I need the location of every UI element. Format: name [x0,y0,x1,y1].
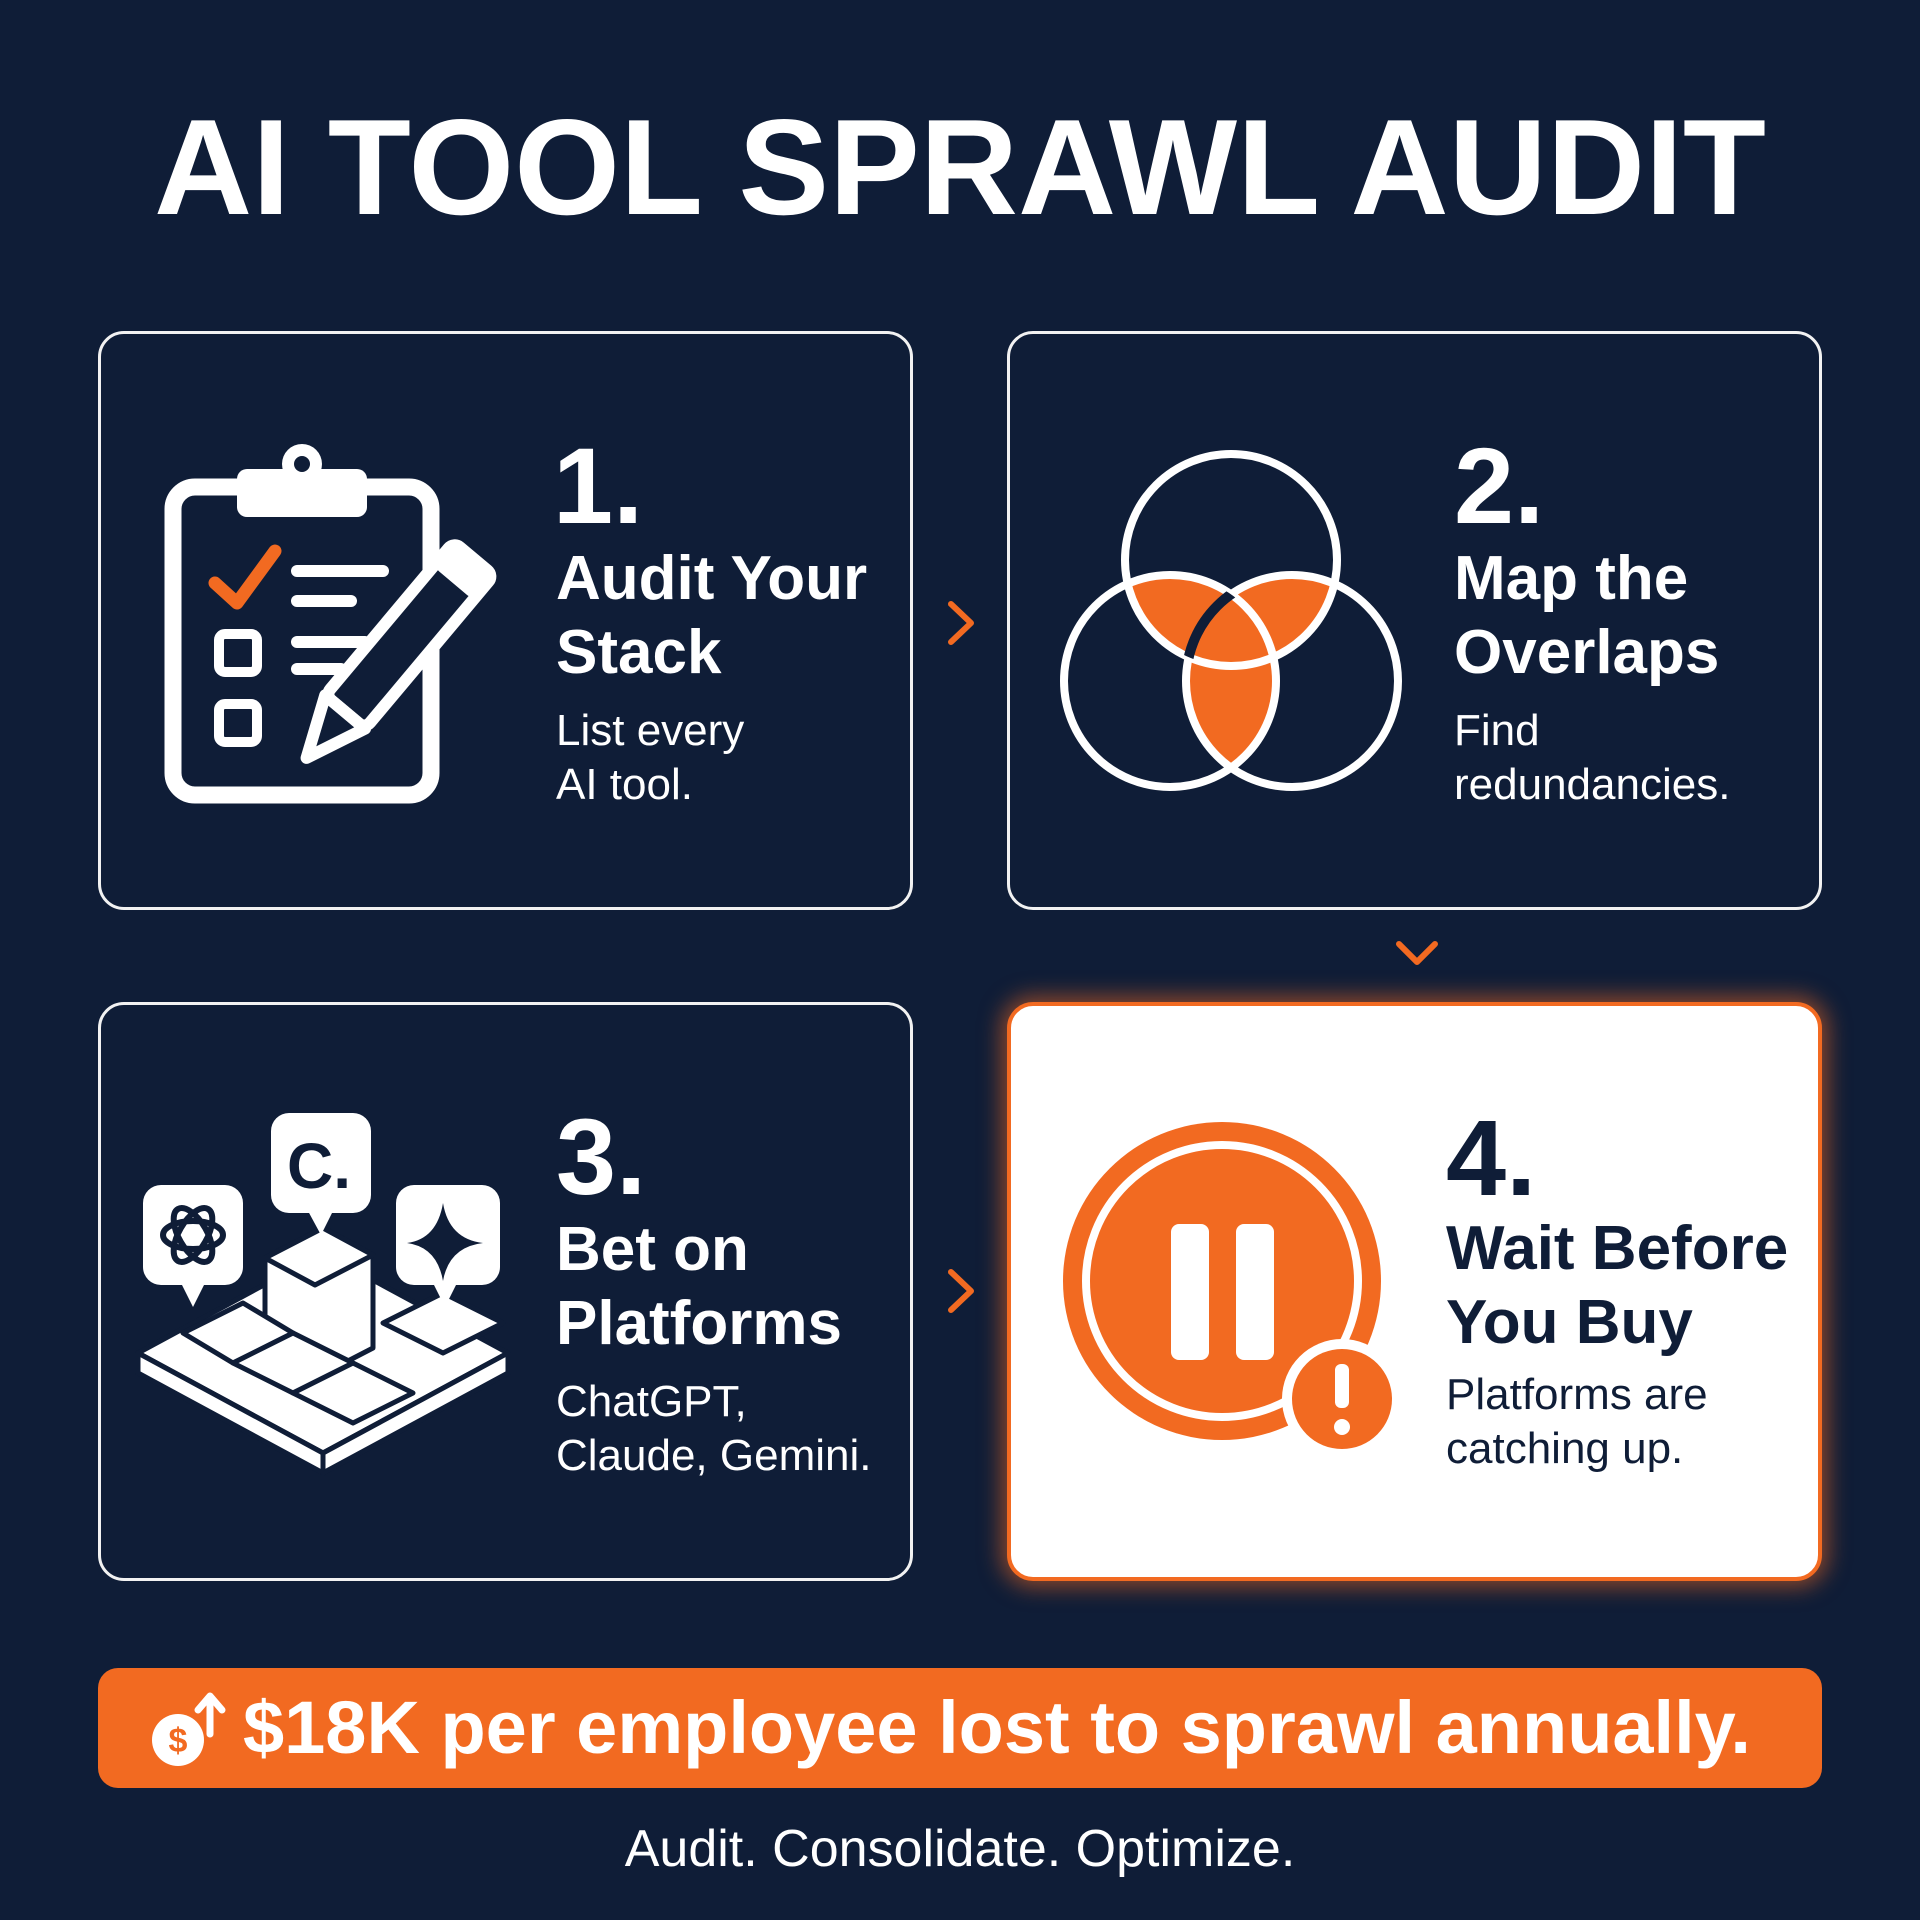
heading [1446,1214,1788,1357]
arrow: down [1396,941,1438,965]
heading: Bet on [556,1215,749,1284]
panel: 2 map the overlaps [1007,331,1822,910]
heading: Platforms [556,1289,842,1358]
arrow: right 2 [948,1269,974,1313]
icon: venn diagram [1060,450,1402,791]
number 2: 2. [1454,425,1544,546]
description: List every [556,706,744,755]
icon: platform blocks: C. [287,1130,351,1202]
heading: Overlaps [1454,618,1719,687]
description: ChatGPT, [556,1377,747,1426]
description: redundancies. [1454,760,1730,809]
description [556,1377,871,1480]
description [1446,1370,1708,1473]
icon: pause with alert [1063,1122,1392,1449]
heading: Map the [1454,544,1688,613]
icon: platform blocks [140,1113,506,1469]
heading [556,544,867,687]
number 1: 1. [553,425,643,546]
description: Platforms are [1446,1370,1708,1419]
footer tagline: Audit. Consolidate. Optimize. [625,1820,1295,1878]
heading [1454,544,1719,687]
panel: 4 wait before you buy [1007,1002,1822,1581]
panel: 3 bet on platforms [98,1002,913,1581]
heading: Wait Before [1446,1214,1788,1283]
description [1454,706,1730,809]
icon: money up [152,1692,226,1766]
heading: You Buy [1446,1288,1693,1357]
number 4: 4. [1446,1097,1536,1218]
description: Find [1454,706,1540,755]
panel: 1 audit your stack [98,331,913,910]
banner text: $18K per employee lost to sprawl annually. [243,1686,1751,1769]
heading: Stack [556,618,721,687]
icon: clipboard [164,444,496,804]
description: AI tool. [556,760,693,809]
description: Claude, Gemini. [556,1431,871,1480]
banner: cost callout [98,1668,1822,1788]
icon: money up: $ [169,1722,188,1760]
title: AI TOOL SPRAWL AUDIT [154,91,1766,243]
number 3: 3. [556,1096,646,1217]
heading: Audit Your [556,544,867,613]
heading [556,1215,842,1358]
description [556,706,744,809]
description: catching up. [1446,1424,1683,1473]
arrow: right 1 [948,601,974,645]
chat bubble C [271,1113,371,1213]
